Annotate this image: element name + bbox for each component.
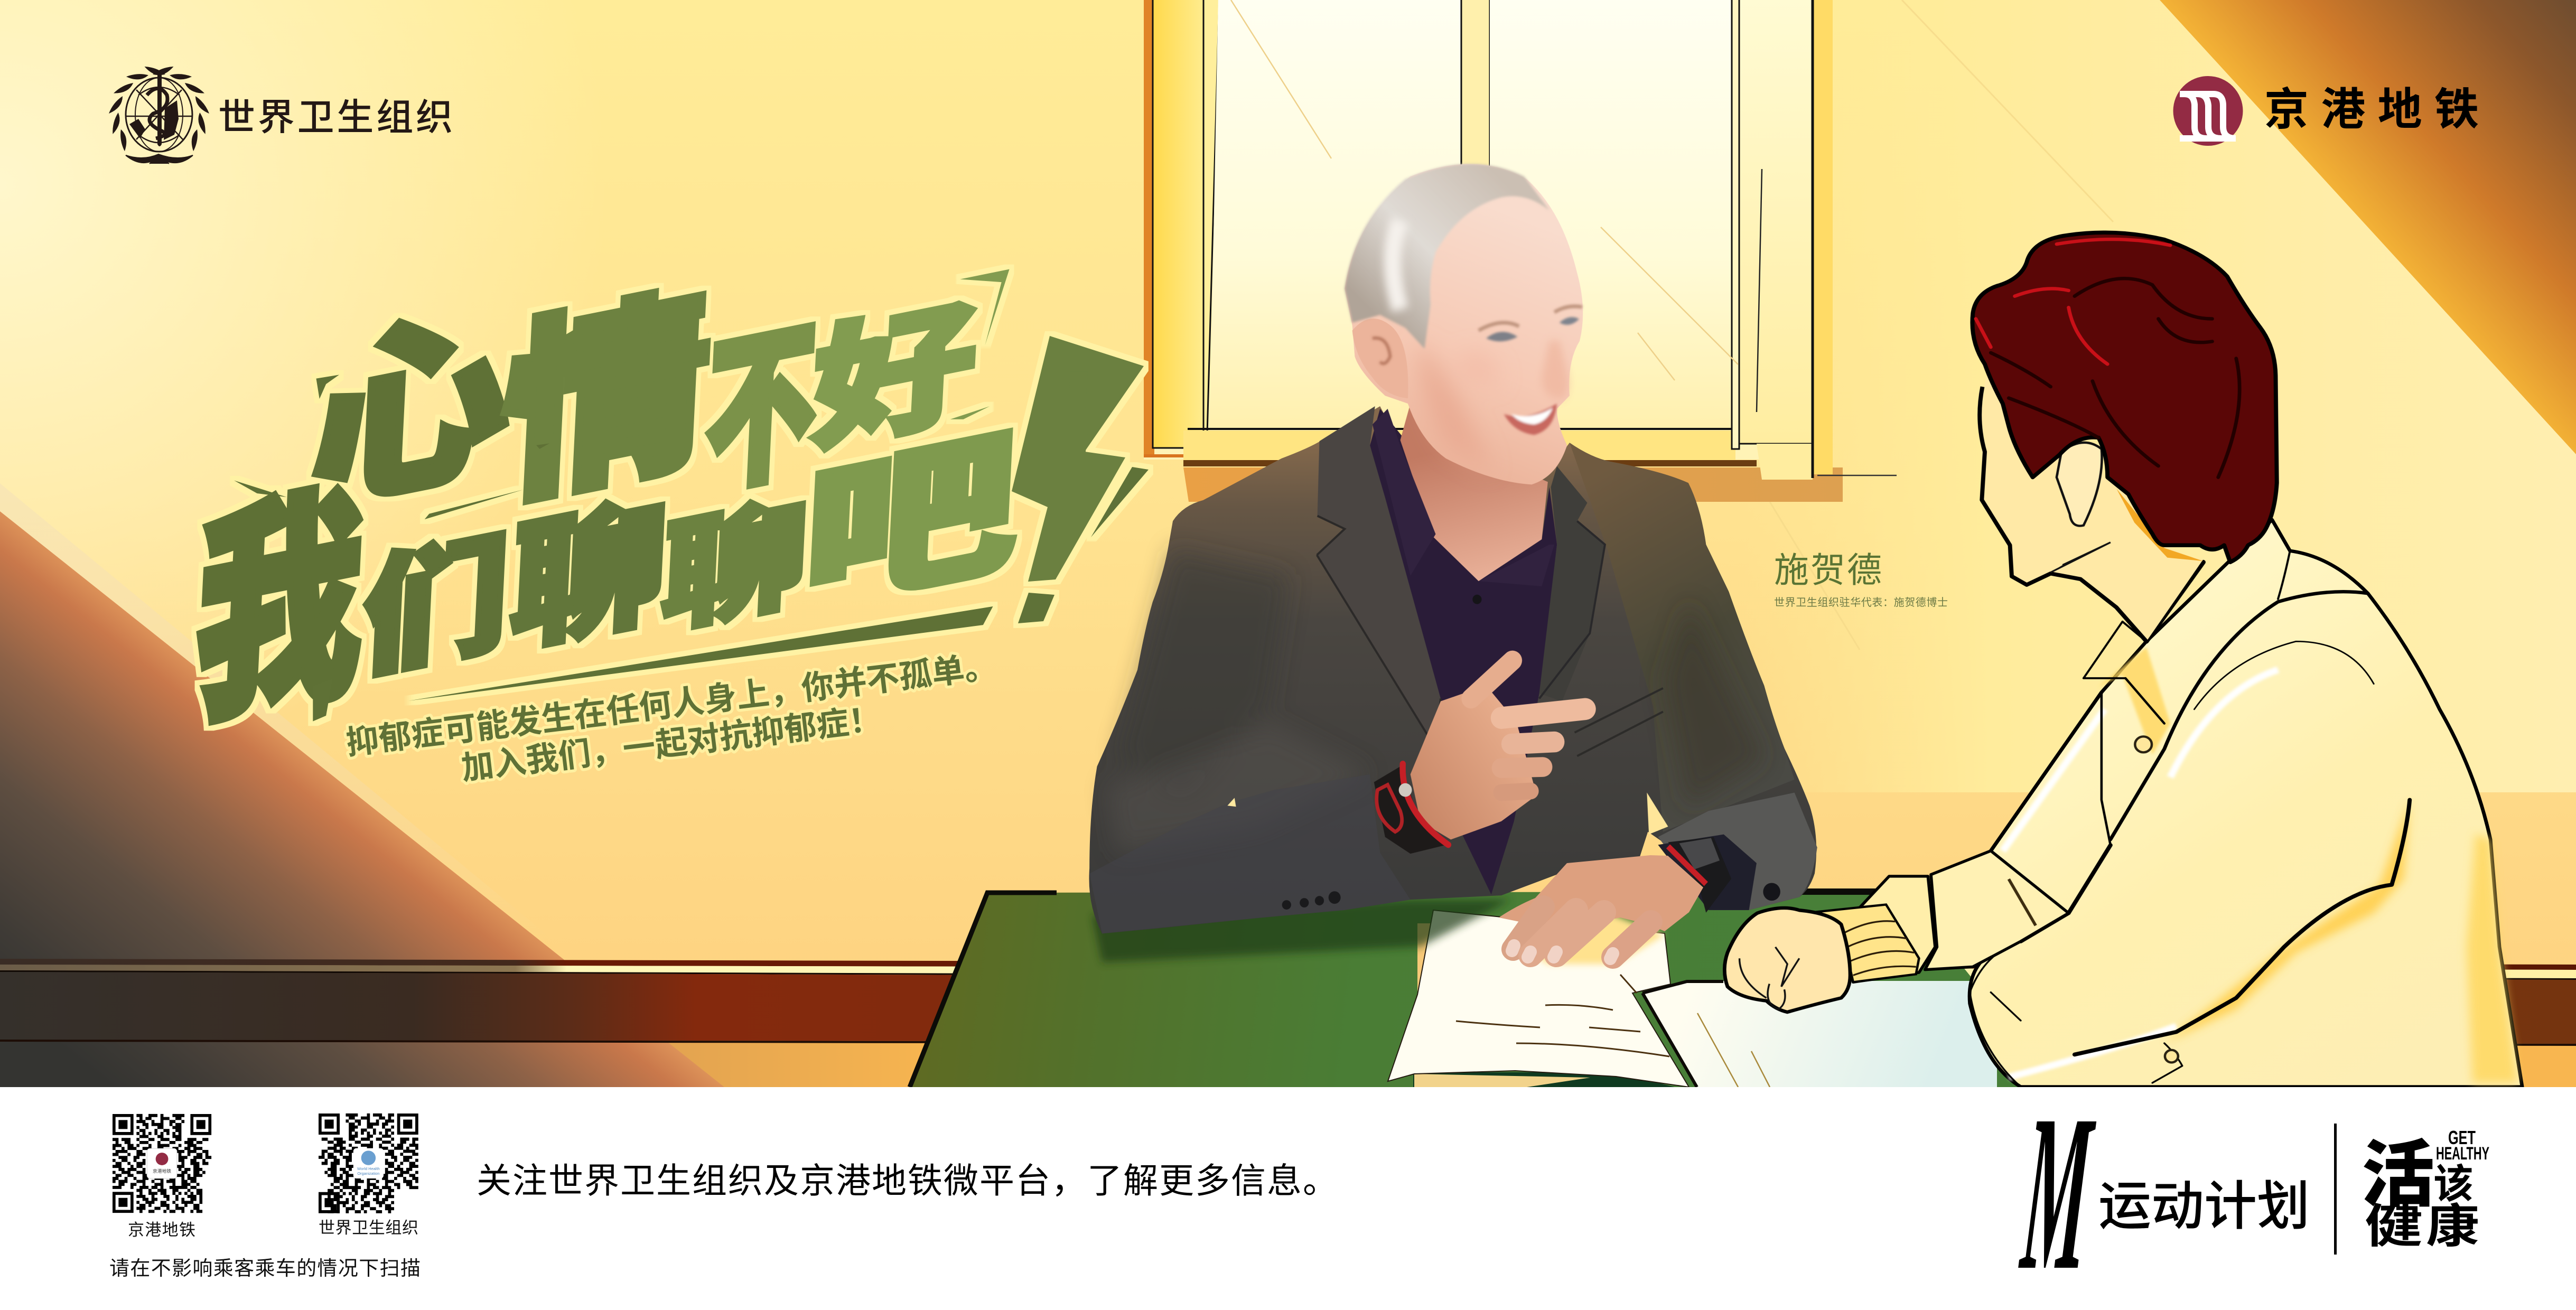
forearm sleeve [1925,851,2069,970]
eyes [1479,306,1582,341]
活该健康 stacked words: 健 [2365,1201,2423,1252]
left lapel [1317,406,1441,748]
top-right gradient triangle [2160,0,2576,454]
jacket pocket [1575,688,1663,756]
soft pale edge along dark triangle [66,554,459,864]
fist [1724,908,1850,1012]
QR code: MTR [113,1114,211,1213]
headline line one: 心 [307,289,515,536]
pointing hand [1411,660,1585,839]
collar shadow [2098,647,2170,755]
wainscot band [0,959,2576,1046]
right jacket shoulder tone [1570,443,1795,832]
headline line one: 不 [701,304,821,516]
table [910,892,2060,1087]
head [1345,164,1583,484]
subtitle line one: 抑郁症可能发生在任何人身上，你并不孤单。 [344,648,999,762]
lower wall strip [668,1041,2576,1087]
ear [1352,319,1408,398]
jacket soft folds [1107,550,1764,853]
sleeve buttons [1282,891,1341,910]
headline line two: 们 [359,520,512,695]
exclamation lightning bolt: ！ [1040,333,1168,581]
headline line two: 聊 [507,483,671,669]
headline line two: 我 [190,465,369,752]
right lapel [1539,466,1605,701]
campaign name: 运动计划 [2098,1177,2310,1236]
QR code: WHO: World Health [357,1166,380,1171]
paper on table [1388,910,1997,1087]
QR label: WHO: 世界卫生组织 [319,1219,418,1237]
scan notice: 请在不影响乘客乘车的情况下扫描 [109,1258,421,1280]
smile [1504,404,1557,435]
brush M: M [2014,1069,2101,1310]
speaker name caption [1774,550,1948,609]
neck and face [1979,376,2203,641]
speaker title: 世界卫生组织驻华代表：施贺德博士 [1774,596,1948,609]
headline subtitle [344,648,999,787]
shirt button [1472,595,1482,604]
face shading [1420,341,1501,472]
light rays on wall [1770,0,2113,650]
listener illustrated figure [1724,232,2522,1087]
活该健康 stacked words: 活 [2362,1135,2434,1216]
headline shards and underline [234,269,1010,721]
subtitle line two: 加入我们，一起对抗抑郁症！ [459,701,883,787]
gap under arm [1227,798,1236,807]
palm [1499,855,1703,931]
headline lettering [190,269,1168,752]
left sleeve fold [1089,774,1411,933]
divider [2334,1124,2337,1255]
hair highlights [1976,239,2239,478]
QR label: MTR: 京港地铁 [128,1221,195,1239]
dark cuff [1658,835,1757,910]
HEALTHY: HEALTHY [2436,1144,2489,1164]
lower-left dark triangle [0,511,724,1087]
black wristband [1374,766,1446,854]
WHO name: 世界卫生组织 [218,97,453,138]
jacket [1089,406,1816,933]
neck gold shadow [2116,489,2203,561]
headline line two [190,412,1022,752]
finger nails [1512,946,1613,959]
follow message: 关注世界卫生组织及京港地铁微平台，了解更多信息。 [477,1161,1338,1200]
hand shadow on paper [1511,914,1664,964]
footer panel [0,1069,2576,1310]
M campaign logo [2014,1069,2310,1310]
headline line one: 好 [808,286,980,469]
shirt collar [1373,409,1554,586]
man in suit photo figure [1089,164,1817,962]
right shirt shadow [2467,834,2517,1083]
shirt button [2135,736,2152,752]
MTR name: 京港地铁 [2264,85,2479,134]
speaker name: 施贺德 [1774,550,1882,590]
活该健康 stacked words: 康 [2426,1201,2479,1252]
headline line two: 吧 [799,412,1022,632]
活该健康 stacked words [2362,1135,2479,1252]
QR code: WHO [319,1114,418,1213]
MTR circle emblem [2173,76,2243,146]
hair [1345,164,1550,349]
ear [2057,443,2102,526]
window [1144,0,1897,502]
red band and bracelet [1377,764,1448,845]
dark shirt [1370,409,1557,894]
MTR logo [2173,76,2479,146]
right sleeve [1658,792,1817,910]
shirt folds [1970,551,2410,1087]
Get Healthy logo [2362,1127,2489,1252]
WHO logo [106,61,453,164]
QR code: WHO: Organization [357,1171,379,1176]
white highlights [2003,670,2278,1077]
headline line two: 聊 [658,483,811,649]
hair [1972,232,2277,562]
torso shirt [1970,520,2522,1087]
nose shadow [1542,341,1569,399]
GET: GET [2448,1127,2476,1148]
watch [1668,837,1731,913]
sleeve fold shading [2164,800,2410,1043]
WHO emblem [106,61,212,164]
gap at right arm [1647,792,1668,835]
cuff [1844,876,1935,982]
headline line one [307,270,980,536]
headline line one: 情 [497,270,715,530]
neck [1400,404,1548,581]
resting hand [1499,855,1703,964]
QR code: MTR: 京港地铁 [153,1168,171,1174]
table shadow under arm [1092,900,1511,962]
cuff buttons [1763,883,1780,901]
活该健康 stacked words: 该 [2433,1162,2474,1207]
sleeve button [2165,1050,2178,1062]
